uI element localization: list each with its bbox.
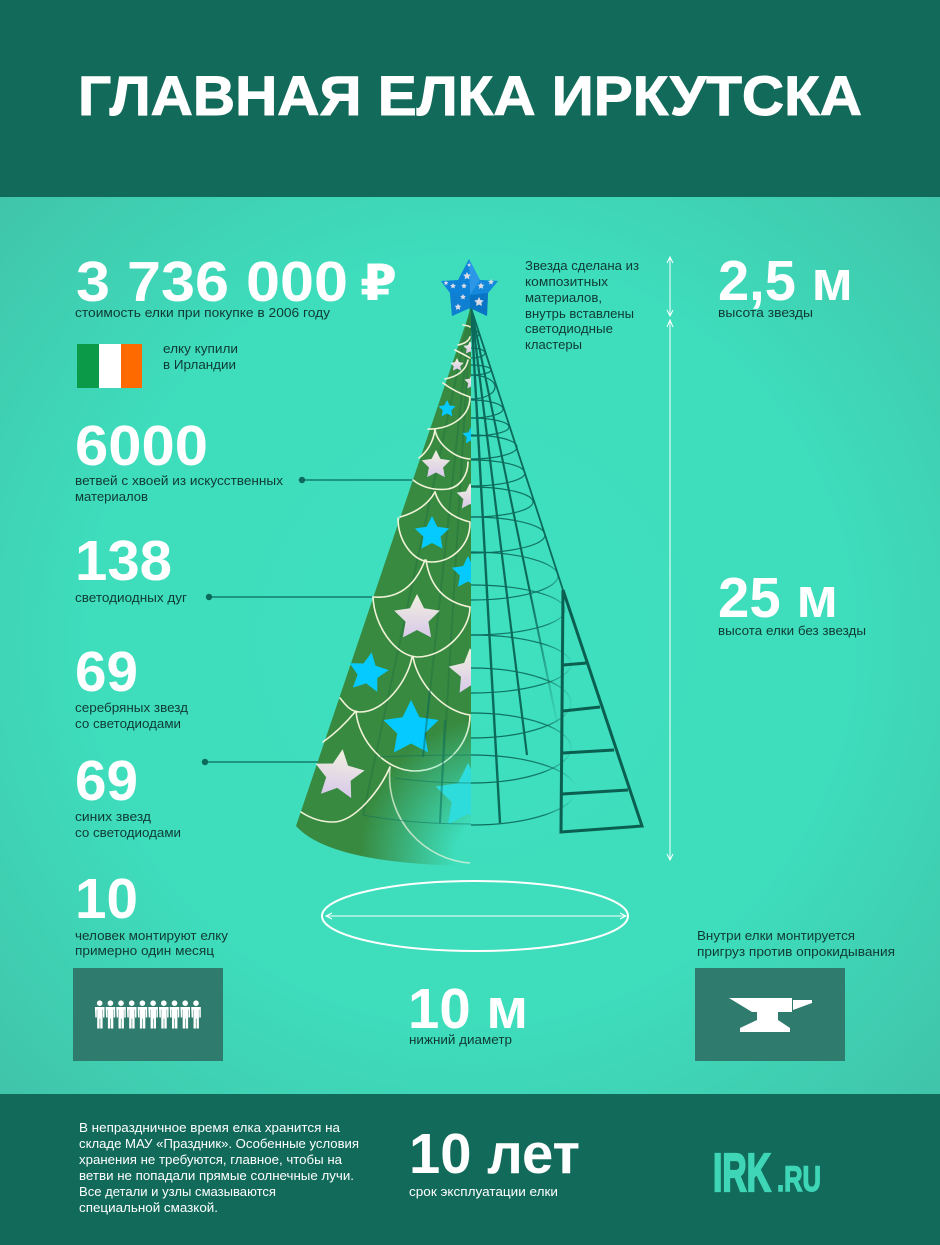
- branches stat: 6000: [75, 414, 208, 478]
- star height stat: высота звезды: [718, 305, 813, 320]
- faded rings and ribs on left side: [363, 690, 471, 824]
- storage text: [79, 1120, 359, 1215]
- logo: IRK: [713, 1143, 771, 1203]
- footer band: [0, 1094, 940, 1245]
- workers stat: человек монтируют елку: [75, 928, 229, 943]
- storage text: хранения не требуются, главное, чтобы на: [79, 1152, 343, 1167]
- workers stat: [75, 867, 229, 958]
- silver stars stat: со светодиодами: [75, 716, 181, 731]
- blue stars: [350, 400, 471, 752]
- fabric cone: [296, 308, 471, 866]
- workers stat: 10: [75, 867, 138, 931]
- flag caption: [163, 341, 238, 372]
- arrow: tree height: [667, 320, 673, 860]
- inner frame shadow: [363, 308, 471, 823]
- base diameter ellipse: [322, 881, 628, 951]
- storage text: складе МАУ «Праздник». Особенные условия: [79, 1136, 359, 1151]
- star description: внутрь вставлены: [525, 306, 634, 321]
- callout lines: [202, 477, 413, 765]
- LED arcs stat: 138: [75, 529, 172, 593]
- service life stat: 10 лет: [409, 1122, 580, 1186]
- star description: кластеры: [525, 337, 582, 352]
- flag caption: елку купили: [163, 341, 238, 356]
- icon: Irish flag: [77, 344, 142, 388]
- blue stars stat: 69: [75, 749, 138, 813]
- branches stat: [75, 414, 284, 504]
- star height stat: 2,5 м: [718, 249, 853, 313]
- diameter stat: нижний диаметр: [409, 1032, 512, 1047]
- tree wireframe: ladder section: [561, 590, 642, 832]
- workers stat: примерно один месяц: [75, 943, 215, 958]
- LED arcs stat: светодиодных дуг: [75, 590, 187, 605]
- storage text: специальной смазкой.: [79, 1200, 218, 1215]
- tree fabric: left half: [296, 308, 471, 865]
- price stat: ₽: [360, 254, 397, 312]
- service life stat: срок эксплуатации елки: [409, 1184, 558, 1199]
- icon: anvil: [695, 968, 845, 1061]
- ballast caption: пригруз против опрокидывания: [697, 944, 895, 959]
- price stat: стоимость елки при покупке в 2006 году: [75, 305, 331, 320]
- star description: композитных: [525, 274, 609, 289]
- star description: материалов,: [525, 290, 602, 305]
- storage text: ветви не попадали прямые солнечные лучи.: [79, 1168, 354, 1183]
- silver stars stat: серебряных звезд: [75, 700, 188, 715]
- faded blue star: [436, 763, 471, 824]
- header band: [0, 0, 940, 197]
- lower garland fading out: [390, 767, 470, 863]
- background panel: [0, 197, 940, 1094]
- logo: .RU: [777, 1160, 821, 1199]
- silver stars: [312, 341, 496, 799]
- tree height stat: 25 м: [718, 566, 838, 630]
- branches stat: ветвей с хвоей из искусственных: [75, 473, 284, 488]
- ballast caption: [697, 928, 895, 959]
- blue stars stat: со светодиодами: [75, 825, 181, 840]
- star description: Звезда сделана из: [525, 258, 639, 273]
- icon: ten workers: [73, 968, 223, 1061]
- blue stars stat: синих звезд: [75, 809, 151, 824]
- storage text: В непраздничное время елка хранится на: [79, 1120, 341, 1135]
- branches stat: материалов: [75, 489, 148, 504]
- tree wireframe: right half: [470, 308, 572, 826]
- icon: star on top of tree: [441, 259, 498, 316]
- ballast caption: Внутри елки монтируется: [697, 928, 855, 943]
- silver stars stat: 69: [75, 640, 138, 704]
- arrow: star height: [667, 257, 673, 316]
- title: ГЛАВНАЯ ЕЛКА ИРКУТСКА: [78, 64, 862, 127]
- star description: светодиодные: [525, 321, 613, 336]
- star description: [525, 258, 639, 352]
- scallop garlands: [301, 325, 470, 822]
- storage text: Все детали и узлы смазываются: [79, 1184, 276, 1199]
- diameter stat: 10 м: [408, 977, 528, 1041]
- silver stars stat: [75, 640, 188, 731]
- tree height stat: высота елки без звезды: [718, 623, 866, 638]
- blue stars stat: [75, 749, 181, 840]
- price stat: 3 736 000: [76, 250, 348, 314]
- flag caption: в Ирландии: [163, 357, 236, 372]
